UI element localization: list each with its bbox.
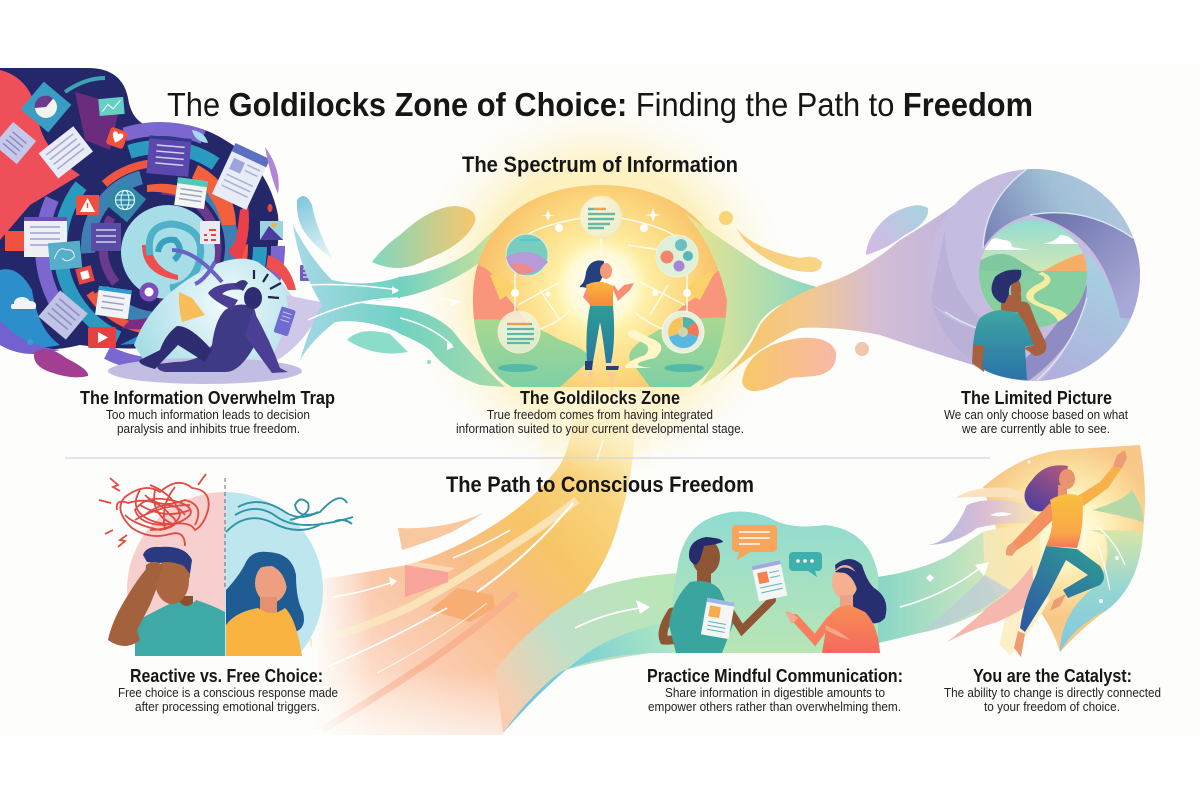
panel: Limited Picture illustration — [715, 169, 1150, 385]
icon: ring badge — [142, 285, 156, 299]
small orb — [855, 342, 869, 356]
text block: Reactive vs Free Choice: Reactive vs. Free Choice: — [130, 666, 323, 686]
bubble: top list — [580, 196, 622, 238]
orange spiral ribbons — [147, 165, 236, 225]
figure: stressed man — [108, 547, 225, 656]
icon: video tile — [88, 327, 116, 348]
icon: bar chart tile — [200, 221, 220, 244]
heading: spectrum of information: The Spectrum of Information — [462, 152, 738, 177]
icon: teal speech bubble — [789, 552, 822, 577]
aura — [983, 445, 1145, 652]
text block: Practice Mindful Communication: empower others rather than overwhelming them. — [648, 700, 901, 714]
pale and orange stripes — [310, 500, 577, 643]
text block: Goldilocks Zone: True freedom comes from having integrated — [487, 408, 713, 422]
icon: calm wind lines — [226, 498, 353, 532]
text block: Goldilocks Zone: The Goldilocks Zone — [520, 388, 680, 408]
arch landscape — [473, 185, 729, 387]
figure: soaring woman — [1006, 450, 1127, 657]
text block: You are the Catalyst: The ability to change is directly connected — [944, 686, 1161, 700]
icon: document held low — [701, 598, 735, 639]
upper wedge — [398, 513, 483, 550]
red ribbon over halo — [266, 255, 296, 290]
icon: globe tile — [104, 180, 146, 222]
text block: Information Overwhelm Trap: The Information Overwhelm Trap — [80, 388, 335, 408]
text block: Information Overwhelm Trap — [80, 388, 335, 436]
panel: stream into communication scene — [495, 512, 886, 733]
panel: path fan of flowing ribbons — [310, 392, 650, 735]
bubble: bottom-left list — [498, 311, 540, 353]
orange block — [430, 588, 495, 622]
warm glow — [400, 90, 800, 490]
text block: Limited Picture: We can only choose based on what — [944, 408, 1128, 422]
red wedge — [0, 70, 80, 240]
panel: catalyst illustration — [900, 445, 1145, 657]
icon: sticky note — [179, 292, 205, 322]
aperture ring — [928, 169, 1140, 381]
text block: You are the Catalyst: to your freedom of choice. — [984, 700, 1120, 714]
heading: path to conscious freedom: The Path to Conscious Freedom — [446, 472, 754, 497]
icon: heart tile — [105, 126, 129, 150]
title: The Goldilocks Zone of Choice: Finding the Path to Freedom — [167, 86, 1033, 123]
arrows — [392, 286, 399, 294]
panel: Goldilocks Zone illustration — [293, 119, 836, 454]
fade overlays — [312, 570, 372, 735]
stray blobs — [866, 205, 928, 255]
icon: tangled scribble — [117, 483, 209, 546]
icon: cloud — [11, 297, 36, 309]
shadow under figure — [108, 358, 302, 384]
streaks and arrow — [333, 582, 393, 597]
text block: You are the Catalyst — [944, 666, 1161, 714]
panel: information overwhelm vortex — [0, 68, 333, 384]
icon: document held up — [752, 560, 787, 602]
figure: calm woman — [226, 552, 304, 656]
bubble: molecule — [656, 235, 698, 277]
dark vortex mass — [0, 68, 279, 349]
pink block — [405, 565, 448, 597]
swirl rings — [42, 129, 278, 365]
figure: woman at centre — [580, 260, 634, 392]
text block: Information Overwhelm Trap: Too much information leads to decision — [106, 408, 310, 422]
network connectors — [515, 218, 687, 330]
figure: overwhelmed person — [139, 270, 288, 373]
icon: orange speech bubble — [732, 525, 777, 560]
icon: warning tile — [76, 195, 99, 215]
icon: pie chart card — [21, 82, 71, 132]
window landscape — [979, 220, 1087, 328]
icon: tablet — [273, 306, 296, 337]
text block: Limited Picture: The Limited Picture — [961, 388, 1112, 408]
icon: photo tile — [75, 265, 95, 285]
scene backdrop — [672, 512, 878, 653]
text block: Practice Mindful Communication: Share information in digestible amounts to — [665, 686, 885, 700]
figure: man seen from behind — [972, 270, 1046, 380]
funnel stream — [715, 170, 1030, 385]
pale halo behind figure — [134, 259, 300, 370]
text block: Reactive vs Free Choice — [118, 666, 338, 714]
panel: reactive vs free choice illustration — [98, 474, 354, 656]
text block: Goldilocks Zone — [456, 388, 744, 436]
bubble: gradient sphere — [506, 234, 548, 276]
lower band: divider — [65, 457, 990, 459]
icon: map tile — [48, 241, 82, 270]
text block: Information Overwhelm Trap: paralysis and inhibits true freedom. — [117, 422, 300, 436]
figure: woman listening — [785, 559, 886, 653]
text block: Limited Picture — [944, 388, 1128, 436]
text block: Practice Mindful Communication — [647, 666, 903, 714]
text block: Reactive vs Free Choice: after processing emotional triggers. — [135, 700, 320, 714]
stream to catalyst — [870, 527, 1040, 645]
text block: Goldilocks Zone: information suited to your current developmental stage. — [456, 422, 744, 436]
icon: red tab — [5, 231, 24, 251]
text block: You are the Catalyst: You are the Catalyst: — [973, 666, 1132, 686]
right streams — [684, 213, 817, 386]
document cards — [0, 122, 270, 340]
central spiral — [149, 224, 201, 288]
icon: landscape tile — [260, 221, 283, 240]
bubble: pie chart — [662, 311, 704, 353]
text block: Limited Picture: we are currently able to see. — [961, 422, 1110, 436]
text block: Reactive vs Free Choice: Free choice is a conscious response made — [118, 686, 338, 700]
split circle — [127, 492, 323, 656]
flame ribbons — [900, 460, 1143, 655]
icon: small list card — [300, 265, 318, 281]
icon: line chart card — [98, 97, 125, 116]
text block: Practice Mindful Communication: Practice Mindful Communication: — [647, 666, 903, 686]
stray blobs — [34, 349, 88, 377]
figure: man with documents — [663, 537, 772, 653]
halo behind figure — [553, 237, 649, 333]
outflow streams — [293, 196, 515, 387]
